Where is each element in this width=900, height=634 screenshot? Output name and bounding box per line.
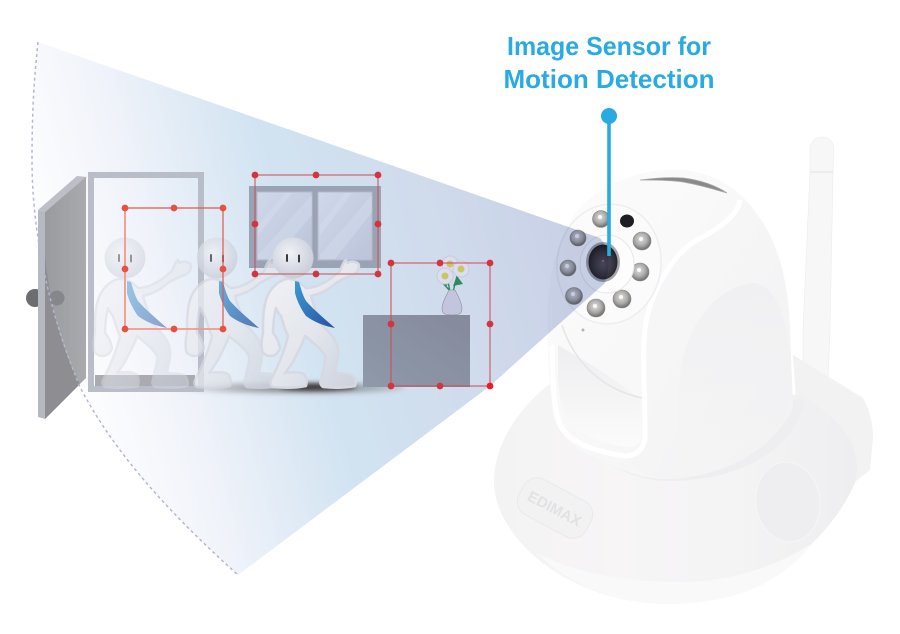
door frame (91, 175, 201, 389)
logo text: EDIMAX (525, 488, 584, 531)
lens (580, 235, 634, 293)
door face outside cone (45, 255, 80, 419)
round label (751, 458, 825, 546)
vase with flowers (437, 256, 469, 315)
title (504, 31, 714, 94)
camera (494, 137, 873, 604)
window reflections (258, 193, 372, 259)
threshold (95, 375, 195, 386)
door face (45, 177, 86, 419)
LED highlights (565, 215, 643, 308)
head ball lower edge (562, 325, 642, 398)
base lower band (537, 543, 813, 604)
door handle back (26, 289, 44, 307)
figure: first man (94, 238, 191, 388)
door top edge (38, 176, 87, 212)
light sensor (620, 214, 634, 228)
camera head shell (547, 170, 793, 479)
right arm inset patch (678, 283, 792, 470)
camera base (494, 385, 857, 604)
detection box: person (122, 205, 226, 332)
arm cavity (558, 345, 642, 447)
scene (26, 175, 470, 419)
right arm surface (630, 200, 793, 479)
detection box: window (252, 172, 381, 277)
camera face ring (549, 197, 669, 331)
camera rear housing (793, 355, 873, 482)
window panes (257, 192, 312, 260)
window (249, 186, 381, 268)
title: Image Sensor for (507, 31, 711, 61)
shell top slit (640, 178, 727, 193)
door (26, 176, 87, 419)
cone dotted edge (32, 42, 238, 575)
title: Motion Detection (504, 64, 714, 94)
LED ring (560, 210, 651, 317)
field of view cone (32, 42, 609, 575)
small hole (582, 328, 584, 332)
antenna (803, 137, 834, 378)
figure: second man (186, 238, 283, 388)
callout pointer (601, 108, 617, 256)
detection box: vase (388, 260, 493, 389)
arm edge highlight (552, 200, 740, 456)
door side edge (38, 210, 45, 419)
figure: third man (262, 238, 359, 388)
side table (363, 315, 470, 387)
logo plate (512, 473, 598, 543)
door handle front (50, 290, 64, 306)
floor shadow (135, 380, 405, 396)
neck ring (550, 390, 805, 481)
